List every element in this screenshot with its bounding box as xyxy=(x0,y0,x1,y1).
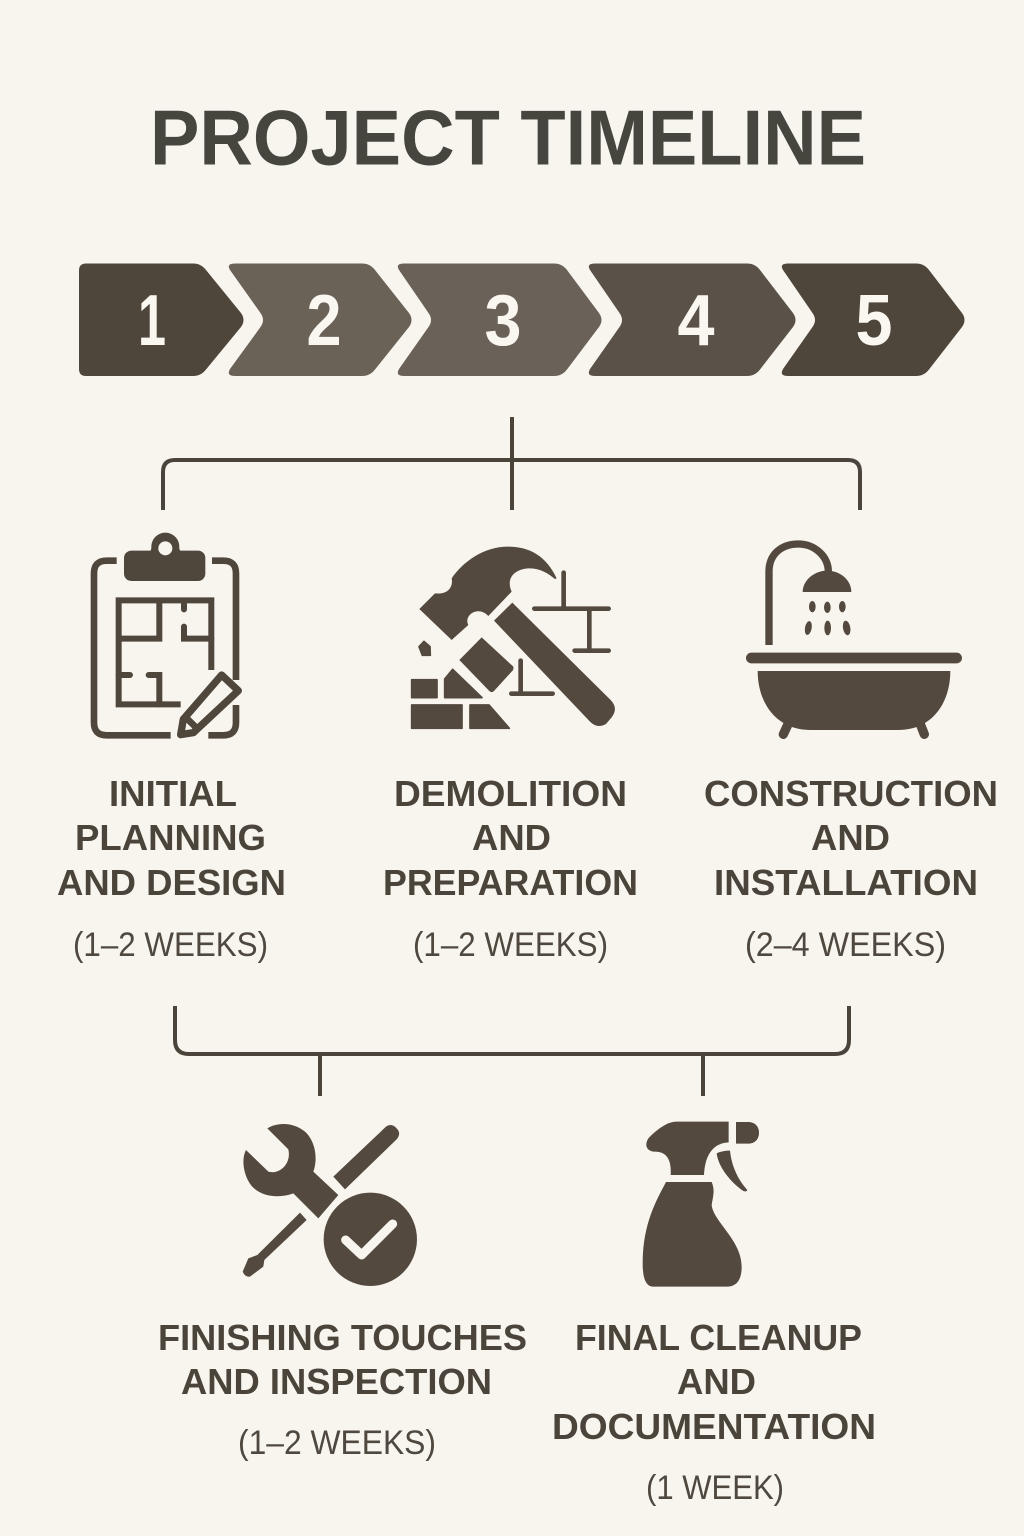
step 5 chevron xyxy=(782,264,964,376)
step 5 label: AND xyxy=(677,1361,756,1402)
step 1 label xyxy=(57,773,286,964)
icon: hammer and bricks xyxy=(412,547,615,728)
icon: wrench, screwdriver and check xyxy=(243,1124,417,1286)
step 3 label: INSTALLATION xyxy=(714,862,978,903)
step 4 chevron xyxy=(589,264,796,376)
connector: lower bracket xyxy=(175,1006,849,1096)
step 1 chevron: 1 xyxy=(138,281,166,361)
step 1 label: AND DESIGN xyxy=(57,862,286,903)
step 3 label: CONSTRUCTION xyxy=(704,773,998,814)
step 5 label: DOCUMENTATION xyxy=(552,1406,876,1447)
step 5 chevron: 5 xyxy=(856,281,892,361)
step 4 label xyxy=(158,1317,527,1462)
icon: clipboard with floor plan xyxy=(94,533,238,735)
chevron progress bar xyxy=(79,264,964,376)
step 1 label: PLANNING xyxy=(75,817,266,858)
step 2 label: DEMOLITION xyxy=(394,773,627,814)
step 2 label xyxy=(383,773,638,964)
step 3 chevron: 3 xyxy=(484,281,522,361)
step 2 chevron: 2 xyxy=(306,281,342,361)
step 4 label: AND INSPECTION xyxy=(181,1361,492,1402)
step 2 label: (1–2 WEEKS) xyxy=(413,926,608,964)
step 1 chevron xyxy=(79,264,244,376)
step 4 label: FINISHING TOUCHES xyxy=(158,1317,527,1358)
title: PROJECT TIMELINE xyxy=(150,94,866,182)
step 2 chevron xyxy=(229,264,412,376)
step 3 chevron xyxy=(398,264,602,376)
step 5 label: (1 WEEK) xyxy=(646,1469,784,1507)
step 4 chevron: 4 xyxy=(678,281,714,361)
step 5 label: FINAL CLEANUP xyxy=(575,1317,862,1358)
step 1 label: (1–2 WEEKS) xyxy=(73,926,268,964)
step 3 label: (2–4 WEEKS) xyxy=(745,926,946,964)
step 4 label: (1–2 WEEKS) xyxy=(238,1424,436,1462)
connector: upper bracket xyxy=(163,417,860,510)
icon: bathtub with shower xyxy=(746,544,962,734)
step 5 label xyxy=(552,1317,876,1507)
step 2 label: PREPARATION xyxy=(383,862,638,903)
icon: spray bottle xyxy=(643,1122,759,1287)
step 3 label xyxy=(704,773,998,964)
step 2 label: AND xyxy=(472,817,551,858)
step 3 label: AND xyxy=(811,817,890,858)
step 1 label: INITIAL xyxy=(109,773,237,814)
